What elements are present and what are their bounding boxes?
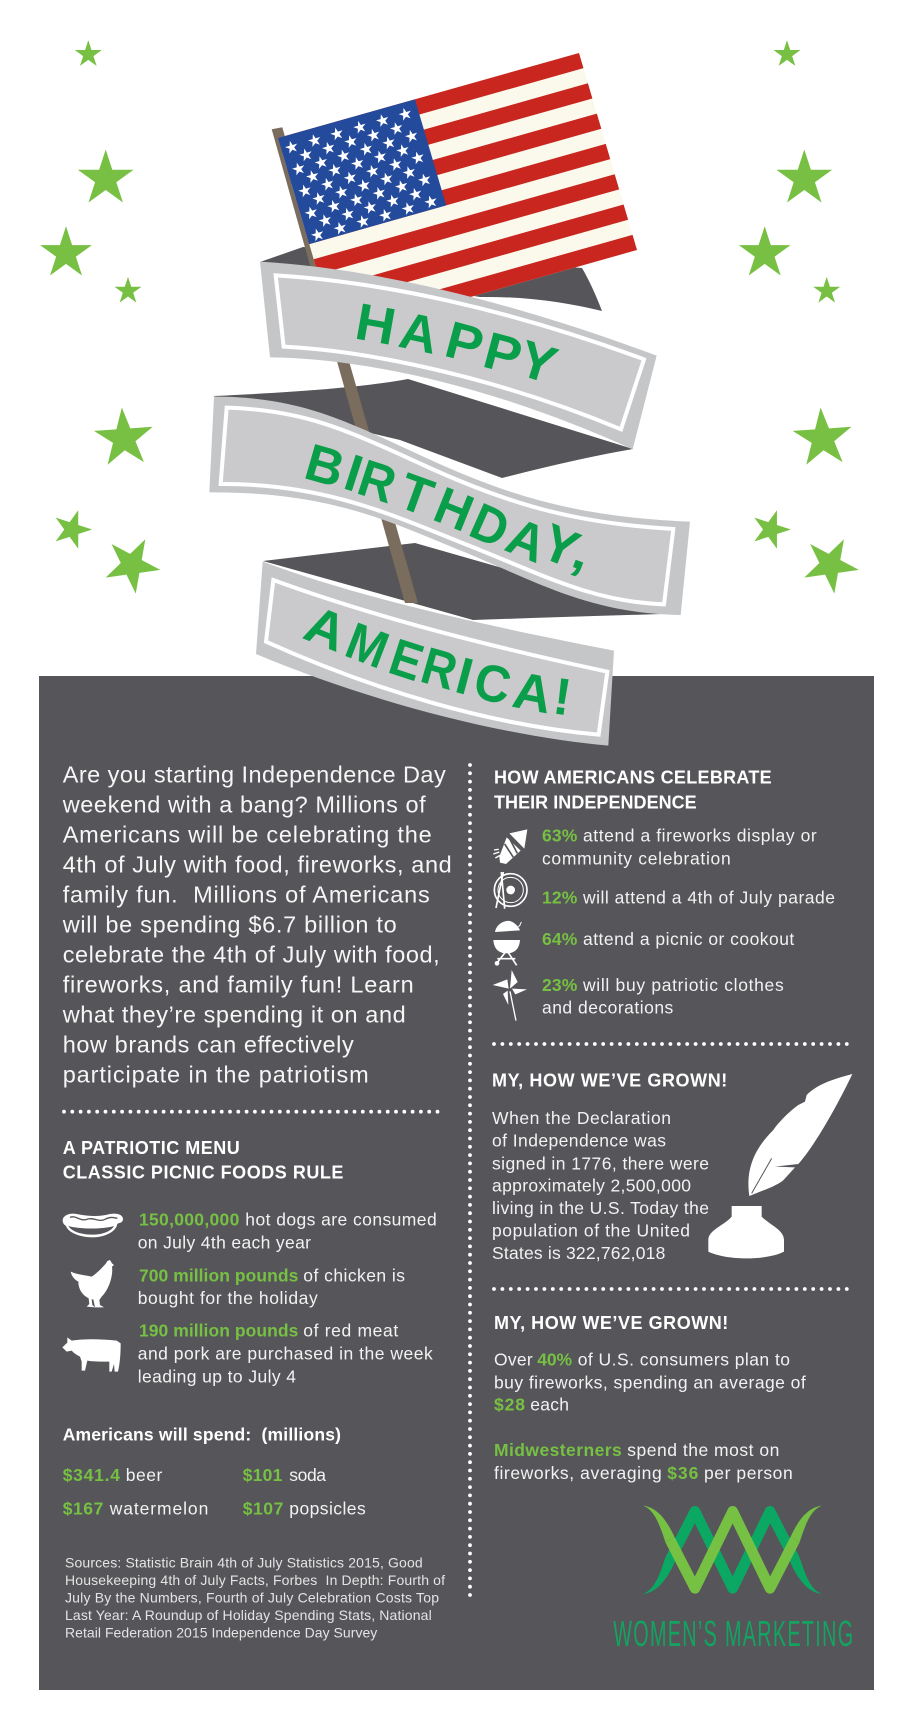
text block: fireworks spending bbox=[494, 1350, 806, 1483]
text block: fireworks spending: of U.S. consumers plan to bbox=[578, 1350, 790, 1370]
text block: fireworks spending: Over bbox=[494, 1350, 533, 1370]
logo: women's marketing: WOMEN’S MARKETING bbox=[613, 1615, 853, 1655]
spending list: $101 bbox=[243, 1465, 283, 1485]
banner: HAPPY: P bbox=[439, 311, 489, 376]
stars: right cluster bbox=[739, 40, 868, 599]
food stat: chicken bbox=[138, 1266, 405, 1308]
food stat: hot dogs bbox=[138, 1209, 437, 1252]
icon: chicken bbox=[71, 1260, 114, 1307]
icon: american flag bbox=[278, 53, 637, 335]
text block: introduction: will be spending $6.7 billion to bbox=[62, 911, 397, 937]
food stat: chicken: 700 million pounds bbox=[139, 1266, 299, 1286]
celebration stat: patriotic clothes: and decorations bbox=[542, 998, 674, 1018]
banner: HAPPY: P bbox=[478, 322, 528, 387]
celebration stat: fireworks: community celebration bbox=[542, 848, 731, 868]
banner: HAPPY: A bbox=[394, 301, 443, 366]
text block: introduction: how brands can effectively bbox=[63, 1031, 354, 1057]
food stat: chicken: bought for the holiday bbox=[138, 1288, 318, 1308]
banner: AMERICA! bbox=[256, 562, 614, 746]
heading: a patriotic menu: A PATRIOTIC MENU bbox=[63, 1138, 240, 1158]
text block: introduction: celebrate the 4th of July with food, bbox=[63, 941, 440, 967]
text block: introduction: fireworks, and family fun! Learn bbox=[63, 971, 414, 997]
text block: introduction bbox=[62, 761, 452, 1087]
text block: introduction: weekend with a bang? Millions of bbox=[62, 791, 426, 817]
banner: AMERICA!: A bbox=[508, 661, 557, 725]
banner: BIRTHDAY,: T bbox=[391, 462, 441, 528]
food stat: red meat and pork: and pork are purchased in the week bbox=[138, 1343, 433, 1363]
text block: introduction: 4th of July with food, fireworks, and bbox=[63, 851, 452, 877]
sources: July By the Numbers, Fourth of July Celebration Costs Top bbox=[65, 1590, 439, 1606]
spending list: soda bbox=[289, 1465, 326, 1485]
text block: fireworks spending: $28 bbox=[494, 1395, 525, 1415]
banner: AMERICA!: M bbox=[338, 611, 396, 680]
text block: population: States is 322,762,018 bbox=[492, 1243, 665, 1263]
text block: population: signed in 1776, there were bbox=[492, 1153, 709, 1173]
celebration stat: fireworks bbox=[542, 826, 817, 868]
spending list bbox=[63, 1425, 366, 1518]
banner: BIRTHDAY,: B bbox=[299, 433, 351, 499]
text block: fireworks spending: Midwesterners bbox=[494, 1440, 622, 1460]
banner: AMERICA!: ! bbox=[550, 668, 575, 727]
text block: population: approximately 2,500,000 bbox=[492, 1176, 691, 1196]
banner: AMERICA!: R bbox=[415, 637, 463, 701]
banner: BIRTHDAY,: Y bbox=[533, 513, 587, 580]
text block: introduction: family fun. Millions of Americans bbox=[63, 881, 430, 907]
food stat: chicken: of chicken is bbox=[303, 1266, 405, 1286]
text block: fireworks spending: per person bbox=[704, 1463, 793, 1483]
sources: Sources: Statistic Brain 4th of July Statistics 2015, Good bbox=[65, 1554, 423, 1570]
banner: HAPPY bbox=[260, 262, 657, 449]
spending list: watermelon bbox=[109, 1498, 208, 1518]
spending list: Americans will spend: (millions) bbox=[63, 1425, 341, 1445]
banner: AMERICA!: I bbox=[450, 647, 479, 707]
celebration stat: fireworks: 63% bbox=[542, 826, 578, 846]
celebration stat: patriotic clothes: 23% bbox=[542, 975, 578, 995]
icon: quill and inkwell bbox=[708, 1074, 852, 1258]
text block: population: of Independence was bbox=[492, 1131, 666, 1151]
banner: AMERICA!: C bbox=[469, 651, 516, 716]
celebration stat: patriotic clothes bbox=[542, 975, 784, 1018]
heading: how americans celebrate: THEIR INDEPENDENCE bbox=[494, 792, 697, 812]
celebration stat: patriotic clothes: will buy patriotic clothes bbox=[582, 975, 784, 995]
text block: fireworks spending: buy fireworks, spending an average of bbox=[494, 1372, 806, 1392]
banner: AMERICA!: E bbox=[383, 628, 430, 693]
banner: BIRTHDAY,: , bbox=[565, 522, 600, 582]
text block: population bbox=[492, 1108, 709, 1263]
banner: BIRTHDAY,: A bbox=[498, 507, 555, 575]
text block: fireworks spending: fireworks, averaging bbox=[494, 1463, 662, 1483]
ribbon back folds bbox=[213, 247, 663, 620]
food stat: red meat and pork: 190 million pounds bbox=[139, 1321, 299, 1341]
heading: my, how we've grown: MY, HOW WE’VE GROWN! bbox=[492, 1071, 727, 1091]
text block: population: population of the United bbox=[492, 1221, 690, 1241]
banner: BIRTHDAY,: D bbox=[462, 491, 518, 559]
celebration stat: picnic: 64% bbox=[542, 929, 578, 949]
food stat: red meat and pork: leading up to July 4 bbox=[138, 1366, 296, 1386]
spending list: beer bbox=[126, 1465, 162, 1485]
icon: hot dog bbox=[63, 1214, 123, 1237]
text block: fireworks spending: spend the most on bbox=[627, 1440, 779, 1460]
banner: HAPPY: H bbox=[351, 293, 400, 357]
logo: women's marketing bbox=[613, 1506, 853, 1655]
icon: cow bbox=[62, 1337, 121, 1372]
sources: Retail Federation 2015 Independence Day Survey bbox=[65, 1625, 377, 1641]
spending list: $341.4 bbox=[63, 1465, 120, 1485]
heading: how americans celebrate bbox=[494, 767, 772, 812]
celebration stat: parade: 12% bbox=[542, 887, 578, 907]
text block: introduction: what they’re spending it on and bbox=[62, 1001, 406, 1027]
text block: introduction: Americans will be celebrating the bbox=[63, 821, 432, 847]
text block: fireworks spending: each bbox=[530, 1395, 569, 1415]
stars: left cluster bbox=[40, 40, 170, 599]
flag pole bbox=[272, 127, 418, 603]
celebration stat: fireworks: attend a fireworks display or bbox=[583, 826, 817, 846]
food stat: hot dogs: on July 4th each year bbox=[138, 1232, 311, 1252]
food stat: red meat and pork bbox=[138, 1321, 433, 1386]
banner: BIRTHDAY, bbox=[209, 397, 690, 615]
banner: AMERICA!: A bbox=[297, 595, 355, 663]
food stat: red meat and pork: of red meat bbox=[303, 1321, 398, 1341]
food stat: hot dogs: hot dogs are consumed bbox=[245, 1209, 437, 1229]
panel: dark background bbox=[39, 676, 874, 1690]
icon: pinwheel bbox=[493, 970, 527, 1021]
celebration stat: picnic: attend a picnic or cookout bbox=[583, 929, 794, 949]
text block: fireworks spending: 40% bbox=[537, 1350, 572, 1370]
banner: HAPPY: Y bbox=[512, 330, 564, 396]
spending list: popsicles bbox=[289, 1498, 366, 1518]
spending list: $107 bbox=[243, 1498, 283, 1518]
sources bbox=[65, 1554, 445, 1641]
text block: introduction: Are you starting Independence Day bbox=[63, 761, 446, 787]
heading: my, how we've grown (fireworks): MY, HOW WE’VE GROWN! bbox=[494, 1313, 728, 1333]
icon: parade drum bbox=[494, 872, 527, 909]
spending list: $167 bbox=[63, 1498, 103, 1518]
food stat: hot dogs: 150,000,000 bbox=[139, 1209, 240, 1229]
sources: Housekeeping 4th of July Facts, Forbes In Depth: Fourth of bbox=[65, 1572, 445, 1588]
text block: fireworks spending: $36 bbox=[667, 1463, 699, 1483]
icon: firework rocket bbox=[493, 829, 527, 864]
icon: grill bbox=[493, 921, 522, 966]
sources: Last Year: A Roundup of Holiday Spending Stats, National bbox=[65, 1607, 432, 1623]
heading: a patriotic menu: CLASSIC PICNIC FOODS RULE bbox=[63, 1162, 343, 1182]
heading: a patriotic menu bbox=[63, 1138, 343, 1182]
text block: introduction: participate in the patriotism bbox=[63, 1061, 369, 1087]
text block: population: When the Declaration bbox=[492, 1108, 671, 1128]
heading: how americans celebrate: HOW AMERICANS CELEBRATE bbox=[494, 767, 772, 787]
banner: BIRTHDAY,: H bbox=[427, 475, 482, 543]
banner: BIRTHDAY,: I bbox=[338, 444, 369, 504]
celebration stat: parade: will attend a 4th of July parade bbox=[582, 887, 835, 907]
banner: BIRTHDAY,: R bbox=[351, 448, 403, 515]
text block: population: living in the U.S. Today the bbox=[492, 1198, 709, 1218]
